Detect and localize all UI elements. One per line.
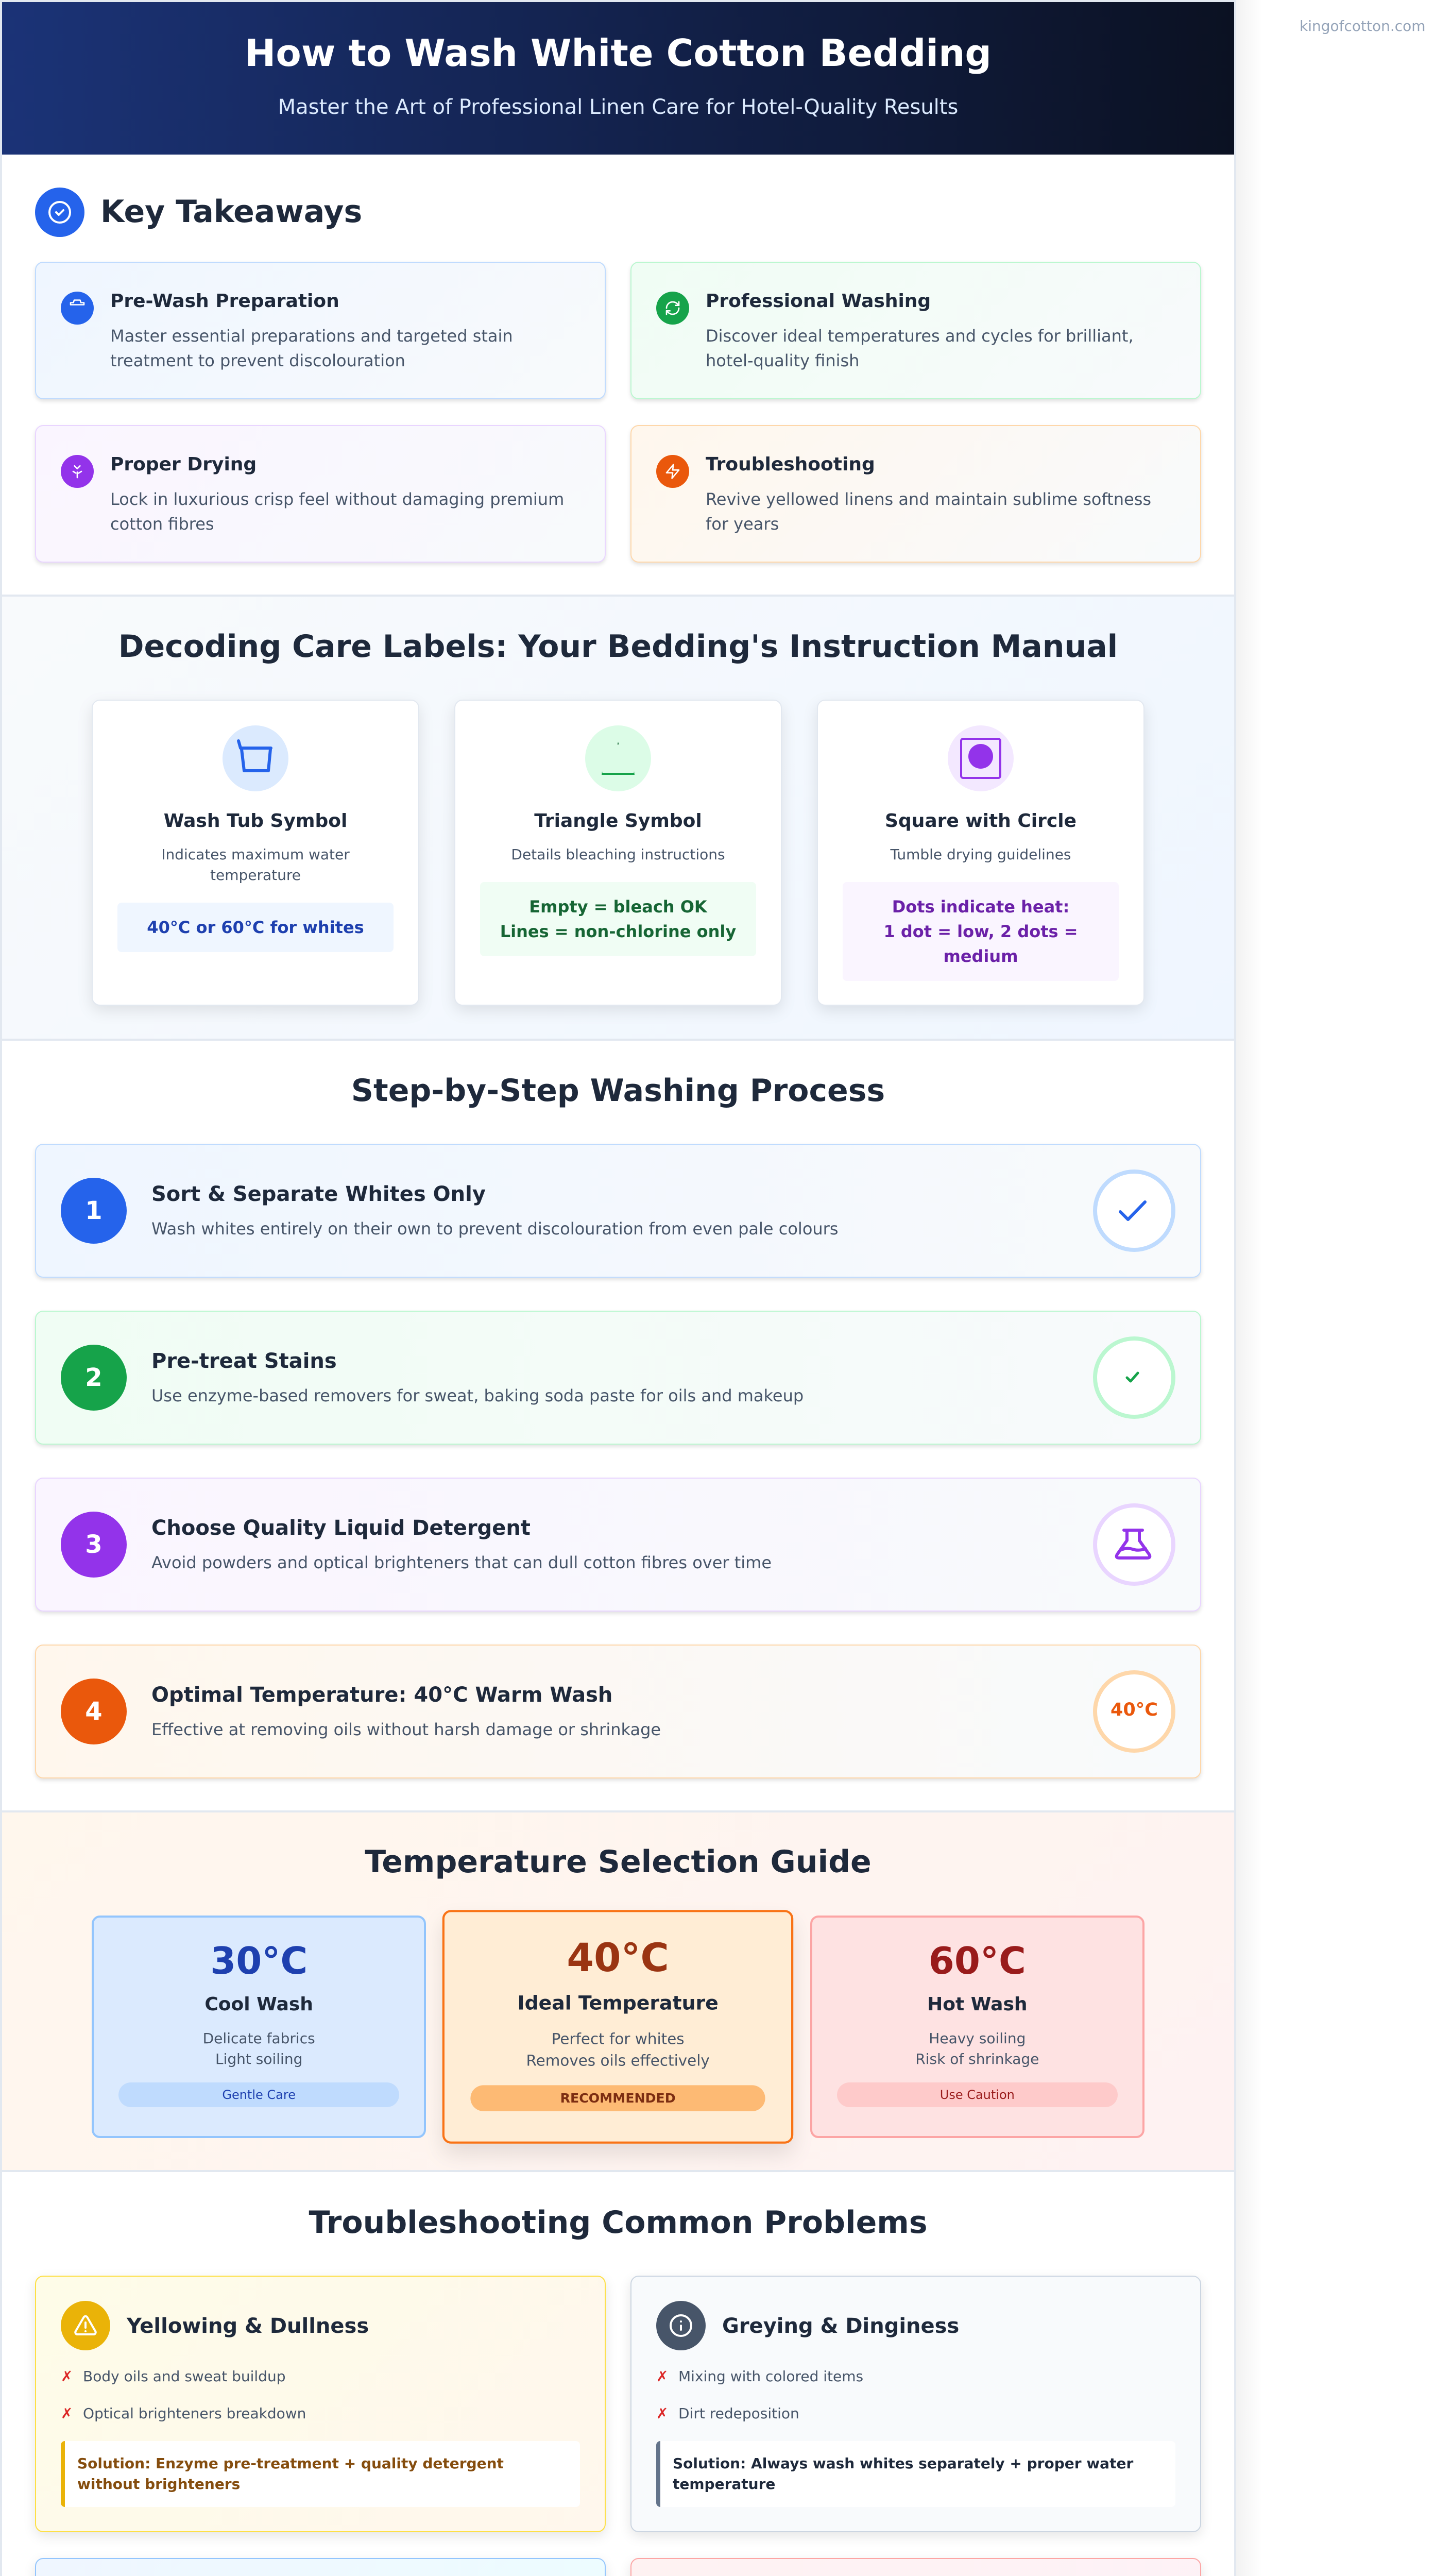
number badge xyxy=(61,1512,127,1578)
number badge xyxy=(61,1178,127,1244)
description: Effective at removing oils without harsh damage or shrinkage xyxy=(151,1720,661,1739)
note xyxy=(117,903,394,952)
card: troubleshooting xyxy=(630,425,1201,563)
icon: refresh xyxy=(656,292,689,325)
temperature value: 30°C xyxy=(210,1939,308,1982)
card: triangle symbol xyxy=(454,700,782,1006)
description: Perfect for whites xyxy=(552,2030,685,2048)
step 1 xyxy=(35,1144,1201,1278)
title: Yellowing & Dullness xyxy=(127,2314,369,2338)
description: treatment to prevent discolouration xyxy=(110,351,405,370)
subtitle: Master the Art of Professional Linen Care for Hotel-Quality Results xyxy=(278,95,958,119)
card: wash tub symbol xyxy=(92,700,419,1006)
icon: lightning xyxy=(656,455,689,488)
description: Indicates maximum water xyxy=(161,846,350,863)
card: pre-wash preparation xyxy=(35,262,606,399)
number badge: 1 xyxy=(85,1196,102,1225)
heading: Temperature Selection Guide xyxy=(365,1844,872,1880)
icon: small check mark xyxy=(1093,1336,1175,1419)
description xyxy=(526,2030,710,2070)
title: Sort & Separate Whites Only xyxy=(151,1182,486,1206)
number badge xyxy=(61,1345,127,1411)
description xyxy=(110,326,513,370)
note xyxy=(480,882,756,956)
title: Wash Tub Symbol xyxy=(164,810,347,832)
icon: flask xyxy=(1093,1503,1175,1586)
icon: pre-wash xyxy=(61,292,94,325)
description xyxy=(203,2030,315,2067)
tag: Gentle Care xyxy=(222,2088,296,2102)
description: Master essential preparations and targeted stain xyxy=(110,326,513,346)
title: Choose Quality Liquid Detergent xyxy=(151,1516,531,1540)
description: Details bleaching instructions xyxy=(511,846,725,863)
number badge: 3 xyxy=(85,1530,102,1559)
cause: Optical brighteners breakdown xyxy=(83,2405,306,2422)
note: medium xyxy=(943,946,1018,966)
description: Heavy soiling xyxy=(929,2030,1026,2047)
note: 40°C or 60°C for whites xyxy=(147,918,364,937)
description: Discover ideal temperatures and cycles for brilliant, xyxy=(706,326,1134,346)
number badge: 2 xyxy=(85,1363,102,1392)
cause marker: ✗ xyxy=(656,2368,668,2385)
icon: 40°C badge: 40°C xyxy=(1111,1700,1158,1720)
panel: decoding care labels xyxy=(0,597,1236,1041)
number badge xyxy=(61,1679,127,1744)
heading: Troubleshooting Common Problems xyxy=(309,2205,928,2241)
description: Revive yellowed linens and maintain sublime softness xyxy=(706,489,1151,509)
cause marker: ✗ xyxy=(61,2368,73,2385)
icon: square with circle xyxy=(948,725,1014,791)
tag xyxy=(118,2082,399,2107)
solution: Solution: Always wash whites separately + proper water xyxy=(673,2455,1133,2472)
icon: triangle xyxy=(585,725,651,791)
description: Delicate fabrics xyxy=(203,2030,315,2047)
card: square with circle xyxy=(817,700,1144,1006)
icon: wash tub xyxy=(223,725,288,791)
heading: key takeaways: Key Takeaways xyxy=(100,194,362,230)
title: Triangle Symbol xyxy=(534,810,702,832)
step 4 xyxy=(35,1645,1201,1778)
heading: Decoding Care Labels: Your Bedding's Instruction Manual xyxy=(118,629,1118,665)
watermark: kingofcotton.com xyxy=(1300,18,1426,35)
description: Lock in luxurious crisp feel without damaging premium xyxy=(110,489,564,509)
temperature value: 60°C xyxy=(929,1939,1026,1982)
card: shrinkage xyxy=(630,2558,1201,2576)
description xyxy=(706,489,1151,534)
note: Dots indicate heat: xyxy=(892,897,1069,917)
description xyxy=(915,2030,1039,2067)
description: Use enzyme-based removers for sweat, baking soda paste for oils and makeup xyxy=(151,1386,804,1405)
note: Empty = bleach OK xyxy=(529,897,707,917)
description: Wash whites entirely on their own to prevent discolouration from even pale colours xyxy=(151,1219,839,1239)
title: Troubleshooting xyxy=(706,454,875,475)
description: cotton fibres xyxy=(110,514,214,534)
name: Hot Wash xyxy=(927,1994,1028,2015)
header banner xyxy=(0,2,1236,155)
heading: Step-by-Step Washing Process xyxy=(351,1073,885,1109)
description: temperature xyxy=(210,867,301,884)
note xyxy=(843,882,1119,981)
icon: check circle xyxy=(35,188,84,237)
description xyxy=(110,489,564,534)
icon: 40°C badge xyxy=(1093,1670,1175,1753)
name: Cool Wash xyxy=(204,1994,313,2015)
tag: Use Caution xyxy=(940,2088,1015,2102)
panel: temperature selection guide xyxy=(0,1812,1236,2172)
icon: drying xyxy=(61,455,94,488)
tag xyxy=(471,2085,765,2111)
cause: Dirt redeposition xyxy=(678,2405,799,2422)
description: Risk of shrinkage xyxy=(915,2050,1039,2067)
description: Avoid powders and optical brighteners that can dull cotton fibres over time xyxy=(151,1553,772,1572)
cause: Mixing with colored items xyxy=(678,2368,863,2385)
panel: troubleshooting common problems xyxy=(0,2172,1236,2576)
card: 60°C xyxy=(810,1916,1144,2138)
title: Pre-treat Stains xyxy=(151,1349,337,1373)
temperature value: 40°C xyxy=(567,1935,669,1980)
tag: RECOMMENDED xyxy=(560,2091,676,2106)
description xyxy=(161,846,350,884)
panel: step-by-step washing process xyxy=(0,1041,1236,1812)
main title: How to Wash White Cotton Bedding xyxy=(245,31,992,75)
description: hotel-quality finish xyxy=(706,351,859,370)
title: Greying & Dinginess xyxy=(722,2314,959,2338)
solution xyxy=(656,2441,1175,2507)
card: 30°C xyxy=(92,1916,426,2138)
solution xyxy=(61,2441,580,2507)
icon: warning xyxy=(61,2301,110,2350)
card: greying and dinginess xyxy=(630,2276,1201,2532)
title: Optimal Temperature: 40°C Warm Wash xyxy=(151,1683,612,1707)
step 3 xyxy=(35,1478,1201,1612)
solution: without brighteners xyxy=(77,2476,240,2493)
name: Ideal Temperature xyxy=(518,1992,719,2014)
card: stiffness and roughness xyxy=(35,2558,606,2576)
title: Square with Circle xyxy=(885,810,1077,832)
cause marker: ✗ xyxy=(61,2405,73,2422)
icon: info xyxy=(656,2301,706,2350)
tag xyxy=(837,2082,1118,2107)
description: Tumble drying guidelines xyxy=(890,846,1071,863)
solution: Solution: Enzyme pre-treatment + quality detergent xyxy=(77,2455,504,2472)
note: 1 dot = low, 2 dots = xyxy=(883,922,1078,941)
description: Removes oils effectively xyxy=(526,2052,710,2070)
description: Light soiling xyxy=(215,2050,302,2067)
step 2 xyxy=(35,1311,1201,1445)
title: Professional Washing xyxy=(706,291,931,312)
card: proper drying xyxy=(35,425,606,563)
title: Pre-Wash Preparation xyxy=(110,291,339,312)
description xyxy=(706,326,1134,370)
card: professional washing xyxy=(630,262,1201,399)
card: 40°C recommended xyxy=(442,1910,794,2144)
title: Proper Drying xyxy=(110,454,257,475)
icon: check mark xyxy=(1093,1170,1175,1252)
description: for years xyxy=(706,514,779,534)
cause: Body oils and sweat buildup xyxy=(83,2368,285,2385)
cause marker: ✗ xyxy=(656,2405,668,2422)
panel: key takeaways xyxy=(0,155,1236,597)
number badge: 4 xyxy=(85,1697,102,1726)
solution: temperature xyxy=(673,2476,775,2493)
card: yellowing and dullness xyxy=(35,2276,606,2532)
note: Lines = non-chlorine only xyxy=(500,922,736,941)
